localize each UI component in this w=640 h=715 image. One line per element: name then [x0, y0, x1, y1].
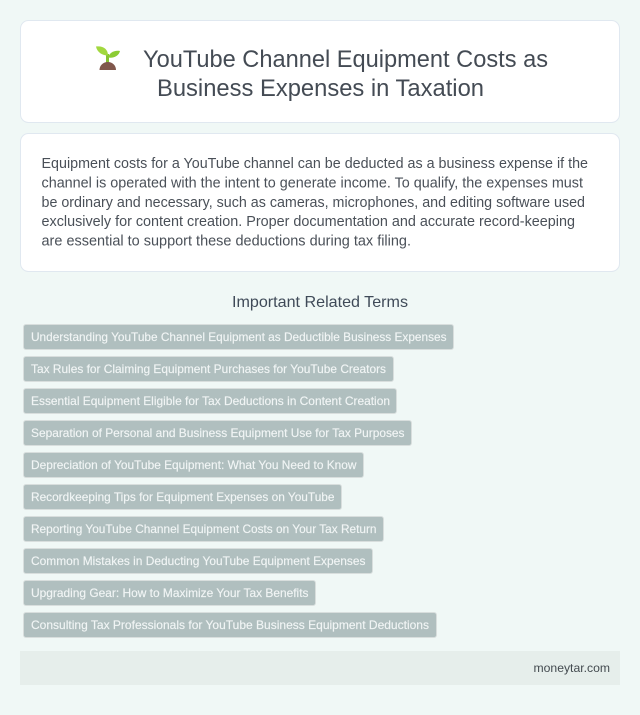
panel: description: [20, 134, 620, 272]
description text: Equipment costs for a YouTube channel can be deducted as a business expense if the: [42, 156, 588, 172]
list: related term tags: [24, 324, 454, 638]
description text: [42, 156, 588, 250]
title text: [143, 46, 548, 102]
title text: YouTube Channel Equipment Costs as: [143, 46, 548, 73]
footer bar: [20, 651, 620, 685]
tag 5: [24, 452, 364, 478]
tag 3: Essential Equipment Eligible for Tax Deductions in Content Creation: [31, 394, 390, 408]
tag 3: [24, 388, 396, 414]
tag 8: [24, 548, 372, 574]
description text: channel is operated with the intent to generate income. To qualify, the expenses must: [42, 176, 583, 192]
tag 10: [24, 612, 436, 638]
tag 8: Common Mistakes in Deducting YouTube Equipment Expenses: [31, 554, 366, 568]
icon: seedling: [96, 46, 120, 70]
tag 10: Consulting Tax Professionals for YouTube Business Equipment Deductions: [31, 618, 429, 632]
tag 1: Understanding YouTube Channel Equipment as Deductible Business Expenses: [31, 330, 446, 344]
description text: be ordinary and necessary, such as cameras, microphones, and editing software used: [42, 195, 585, 211]
title text: Business Expenses in Taxation: [157, 75, 484, 102]
tag 9: [24, 580, 316, 606]
heading: important related terms: Important Related Terms: [232, 294, 408, 311]
footer source text: moneytar.com: [534, 661, 610, 675]
description text: are essential to support these deductions during tax filing.: [42, 234, 411, 250]
tag 7: Reporting YouTube Channel Equipment Costs on Your Tax Return: [31, 522, 376, 536]
tag 9: Upgrading Gear: How to Maximize Your Tax Benefits: [31, 586, 308, 600]
tag 4: Separation of Personal and Business Equipment Use for Tax Purposes: [31, 426, 404, 440]
tag 5: Depreciation of YouTube Equipment: What You Need to Know: [31, 458, 357, 472]
tag 6: [24, 484, 342, 510]
description text: exclusively for content creation. Proper documentation and accurate record-keeping: [42, 214, 575, 230]
tag 4: [24, 420, 412, 446]
tag 2: [24, 356, 394, 382]
tag 1: [24, 324, 454, 350]
tag 2: Tax Rules for Claiming Equipment Purchases for YouTube Creators: [31, 362, 386, 376]
panel: title card: [20, 20, 620, 122]
tag 6: Recordkeeping Tips for Equipment Expenses on YouTube: [31, 490, 335, 504]
tag 7: [24, 516, 384, 542]
